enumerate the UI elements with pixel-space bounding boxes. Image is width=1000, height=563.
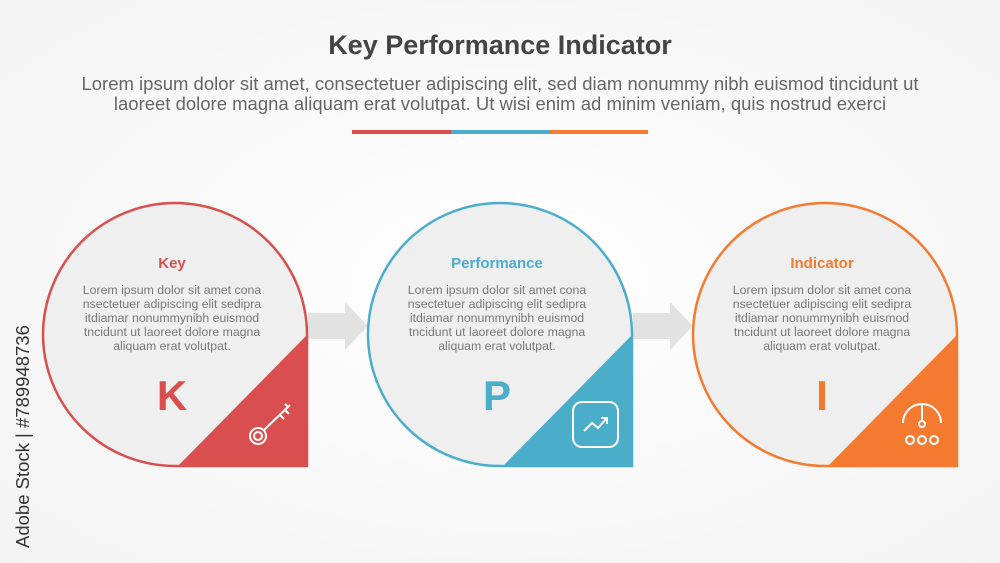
panel: key: aliquam erat volutpat. xyxy=(113,339,231,353)
panel: indicator: Indicator xyxy=(790,255,854,272)
subtitle: Lorem ipsum dolor sit amet, consectetuer adipiscing elit, sed diam nonummy nibh euismod tincidunt ut xyxy=(81,73,919,94)
panel: indicator: I xyxy=(816,372,828,419)
panel: key: nsectetuer adipiscing elit sedipra xyxy=(83,297,261,311)
panel: performance: itdiamar nonummynibh euismod xyxy=(410,311,584,325)
panel: key: Lorem ipsum dolor sit amet cona xyxy=(83,283,261,297)
panel: indicator: Lorem ipsum dolor sit amet cona xyxy=(733,283,911,297)
subtitle: laoreet dolore magna aliquam erat volutpat. Ut wisi enim ad minim veniam, quis nostrud exerci xyxy=(114,93,886,114)
panel: performance: Lorem ipsum dolor sit amet cona xyxy=(408,283,586,297)
panel: indicator xyxy=(693,203,957,466)
icon: gauge xyxy=(903,404,941,444)
color divider xyxy=(352,130,648,134)
panel: indicator: nsectetuer adipiscing elit sedipra xyxy=(733,297,911,311)
panel: key: K xyxy=(157,372,187,419)
panel: indicator: aliquam erat volutpat. xyxy=(763,339,881,353)
panel: performance: aliquam erat volutpat. xyxy=(438,339,556,353)
side watermark label: Adobe Stock | #789948736 xyxy=(12,325,33,548)
subtitle xyxy=(81,73,919,114)
title: Key Performance Indicator xyxy=(328,30,672,60)
panel: performance: Performance xyxy=(451,255,543,272)
panel: key: Key xyxy=(158,255,186,272)
panel: performance: P xyxy=(483,372,511,419)
panel: performance xyxy=(368,203,632,466)
panel: performance: nsectetuer adipiscing elit sedipra xyxy=(408,297,586,311)
icon: chart xyxy=(573,402,618,447)
panel: key: tncidunt ut laoreet dolore magna xyxy=(84,325,260,339)
panel: key: itdiamar nonummynibh euismod xyxy=(85,311,259,325)
panel: key xyxy=(43,203,307,466)
arrow 2 xyxy=(633,302,693,350)
panel: performance: tncidunt ut laoreet dolore magna xyxy=(409,325,585,339)
panel: indicator: tncidunt ut laoreet dolore magna xyxy=(734,325,910,339)
panel: indicator: itdiamar nonummynibh euismod xyxy=(735,311,909,325)
icon: key xyxy=(250,404,290,444)
arrow 1 xyxy=(308,302,368,350)
